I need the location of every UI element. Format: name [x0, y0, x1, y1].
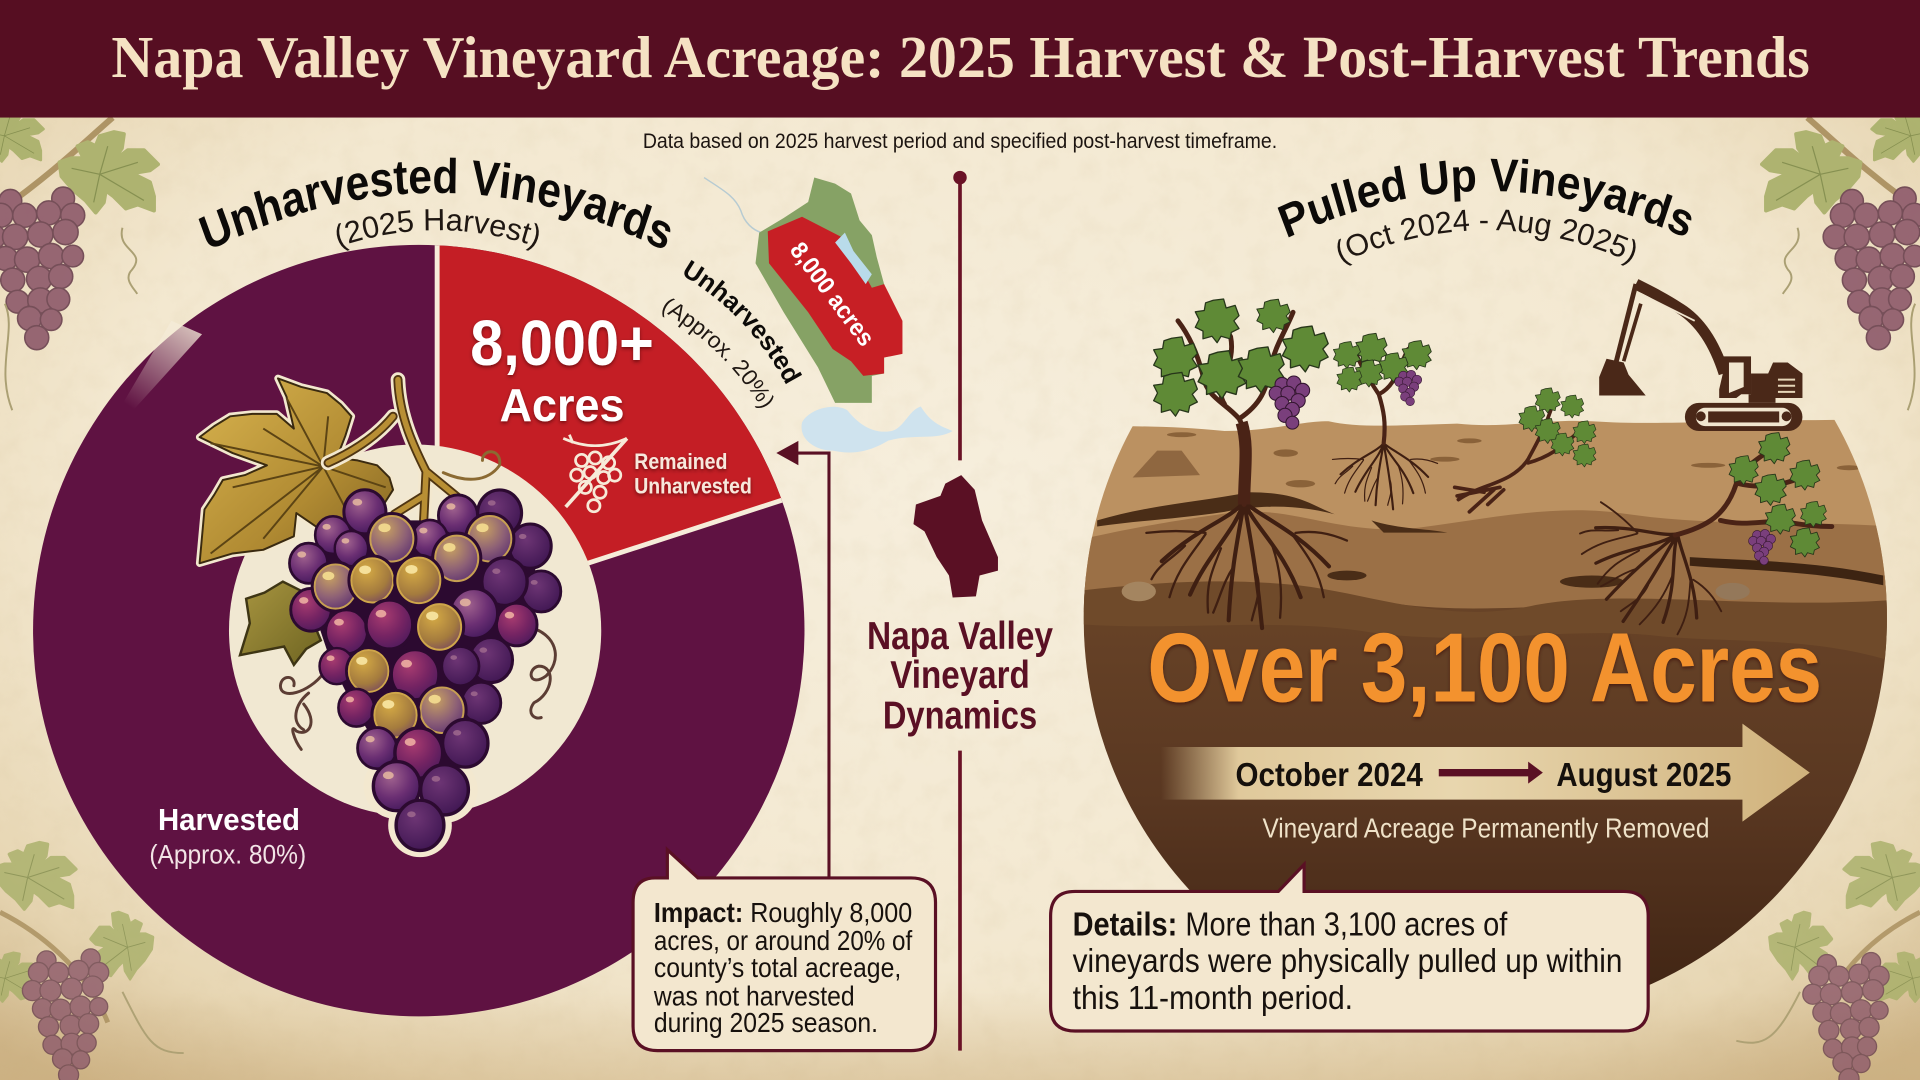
header banner — [0, 0, 1920, 118]
centre label: Napa Valley — [867, 615, 1053, 658]
soil cracks and stones — [1097, 432, 1883, 601]
callout: impact: county’s total acreage, — [654, 952, 901, 983]
heading: Unharvested Vineyards — [198, 158, 670, 248]
callout: details: Details: More than 3,100 acres of — [1073, 907, 1508, 944]
timeline arrow: October 2024 — [1236, 757, 1423, 794]
unharvested red — [768, 217, 902, 376]
label: unharvested share: (Approx. 20%) — [662, 298, 774, 408]
subheading: (2025 Harvest) — [336, 209, 539, 251]
label: unharvested share: Unharvested — [684, 260, 802, 384]
icon: napa county silhouette — [913, 475, 998, 598]
subheading: (Oct 2024 - Aug 2025) — [1337, 210, 1636, 266]
bay — [802, 407, 953, 452]
vine: uprooted, pulled — [1551, 433, 1832, 666]
cluster backing — [312, 520, 539, 796]
arrow: impact connector — [776, 441, 829, 879]
callout: impact: during 2025 season. — [654, 1007, 878, 1038]
stem — [328, 380, 460, 520]
label: harvested: (Approx. 80%) — [149, 839, 306, 869]
title: Napa Valley Vineyard Acreage: 2025 Harvest & Post-Harvest Trends — [111, 25, 1810, 90]
map: napa county — [704, 178, 953, 452]
grapes — [289, 490, 561, 850]
icon: excavator — [1599, 284, 1802, 431]
icon: no grapes — [563, 435, 627, 512]
vine: large — [1146, 299, 1347, 628]
illustration: grape bunch — [200, 378, 561, 857]
decoration: top-left vine — [0, 108, 158, 410]
callout: details — [1051, 864, 1648, 1031]
label: remained unharvested: Remained — [634, 449, 727, 474]
pie: unharvested wedge — [434, 245, 782, 566]
callout: impact: was not harvested — [653, 980, 855, 1011]
decoration: bottom-left vine — [0, 843, 184, 1080]
pie: harvested — [33, 245, 804, 1016]
callout: impact: Impact: Roughly 8,000 — [654, 897, 912, 928]
callout: impact — [633, 850, 936, 1051]
map label: 8,000 acres — [784, 238, 879, 352]
pie centre disc — [229, 444, 601, 817]
centre label — [867, 615, 1053, 738]
callout: details: this 11-month period. — [1073, 980, 1353, 1017]
timeline arrow: August 2025 — [1556, 757, 1731, 794]
label: remained unharvested — [634, 449, 752, 498]
label: remained unharvested: Unharvested — [634, 473, 752, 498]
vine: small — [1332, 333, 1438, 509]
stat: over 3,100 acres: Over 3,100 Acres — [1147, 613, 1822, 723]
centre divider — [955, 173, 965, 1051]
callout: impact: acres, or around 20% of — [654, 925, 912, 956]
leaf: small — [240, 582, 321, 665]
centre label: Dynamics — [883, 695, 1037, 738]
decoration: top-right vine — [1762, 108, 1920, 410]
heading: Pulled Up Vineyards — [1278, 158, 1692, 238]
timeline arrow — [1161, 724, 1810, 822]
cream outline of bunch — [364, 753, 478, 857]
leaf: large — [200, 378, 393, 563]
panel: pulled up vineyards — [1049, 158, 1887, 1033]
stat: 8,000+ acres: Acres — [500, 379, 624, 431]
label: harvested: Harvested — [158, 803, 300, 837]
county green — [756, 178, 902, 403]
stat: 8,000+ acres: 8,000+ — [470, 308, 654, 379]
panel: unharvested vineyards — [33, 158, 804, 1016]
stat: 8,000+ acres — [470, 308, 654, 431]
label: harvested — [149, 803, 306, 869]
data note: Data based on 2025 harvest period and specified post-harvest timeframe. — [643, 130, 1277, 153]
tendrils — [280, 452, 555, 749]
soil cross-section — [1084, 420, 1892, 1029]
centre label: Vineyard — [890, 654, 1030, 697]
pie sheen — [122, 321, 202, 413]
caption: Vineyard Acreage Permanently Removed — [1262, 813, 1709, 844]
callout: details: vineyards were physically pulled up within — [1073, 943, 1622, 980]
lake — [835, 233, 872, 284]
vine: uprooted, leaning — [1455, 388, 1596, 512]
decoration: bottom-right vine — [1736, 843, 1920, 1080]
